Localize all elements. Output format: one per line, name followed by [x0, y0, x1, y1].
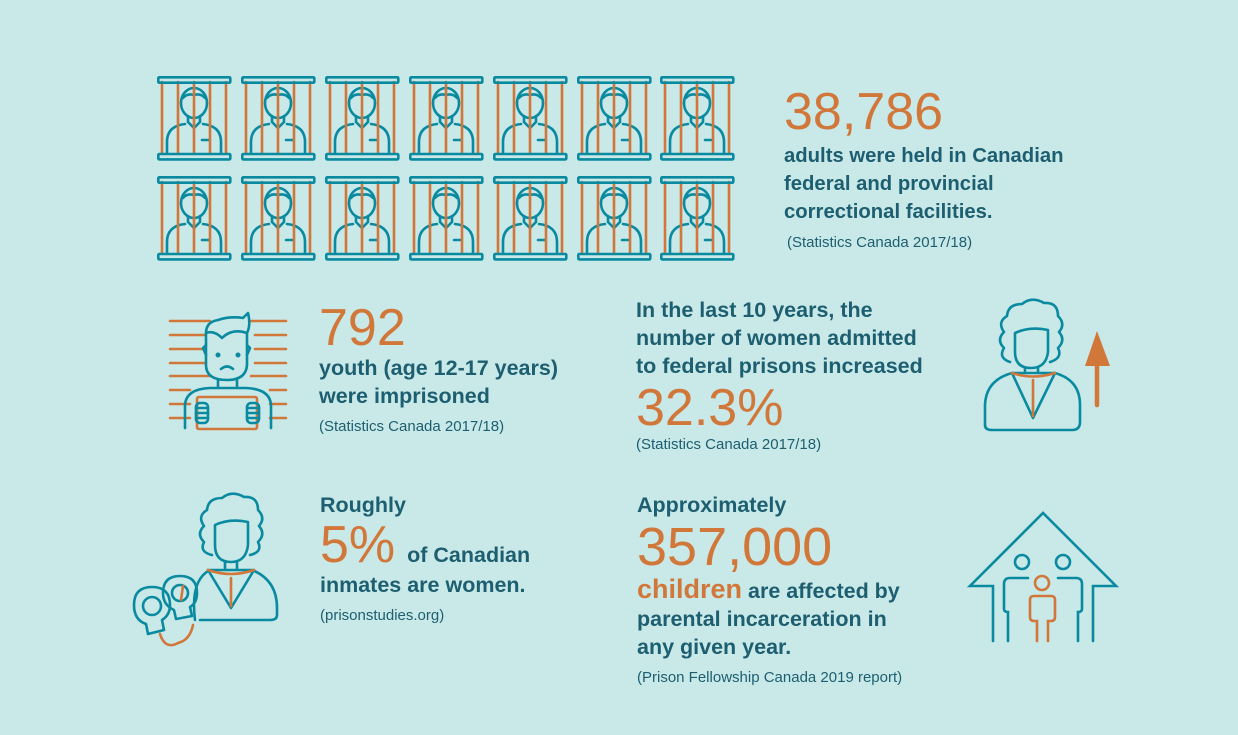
stat: adults: adults were held in Canadian	[784, 145, 1064, 167]
stat: 5% women: 5% of Canadian	[320, 516, 530, 574]
stat: youth: 792	[319, 299, 406, 357]
stat: adults: federal and provincial	[784, 173, 994, 195]
stat: women admitted: 32.3%	[636, 379, 783, 437]
icon grid: prison cells	[158, 77, 733, 259]
stat: adults: (Statistics Canada 2017/18)	[787, 234, 972, 251]
icon: woman with handcuffs	[134, 494, 277, 645]
icon: house with family	[970, 513, 1116, 641]
stat: youth: were imprisoned	[319, 384, 490, 408]
stat: children: children are affected by	[637, 574, 900, 604]
stat: women admitted: to federal prisons increased	[636, 354, 923, 378]
stat: children: (Prison Fellowship Canada 2019 report)	[637, 669, 902, 686]
stat: children	[637, 493, 902, 686]
stat: youth	[319, 299, 558, 435]
stat: 5% women: (prisonstudies.org)	[320, 607, 444, 624]
stat: women admitted	[636, 298, 923, 453]
icon: woman with up arrow	[985, 300, 1110, 430]
stat: women admitted: number of women admitted	[636, 326, 917, 350]
stat: 5% women	[320, 493, 530, 624]
stat: children: Approximately	[637, 493, 786, 517]
stat: adults	[784, 83, 1064, 251]
stat: children: any given year.	[637, 635, 791, 659]
icon: youth mugshot	[170, 313, 286, 429]
stat: youth: (Statistics Canada 2017/18)	[319, 418, 504, 435]
stat: children: 357,000	[637, 517, 832, 577]
stat: adults: correctional facilities.	[784, 201, 993, 223]
stat: adults: 38,786	[784, 83, 943, 141]
stat: 5% women: inmates are women.	[320, 573, 526, 597]
stat: 5% women: Roughly	[320, 493, 406, 517]
stat: women admitted: In the last 10 years, the	[636, 298, 873, 322]
stat: youth: youth (age 12-17 years)	[319, 356, 558, 380]
stat: children: parental incarceration in	[637, 607, 887, 631]
stat: women admitted: (Statistics Canada 2017/18)	[636, 436, 821, 453]
